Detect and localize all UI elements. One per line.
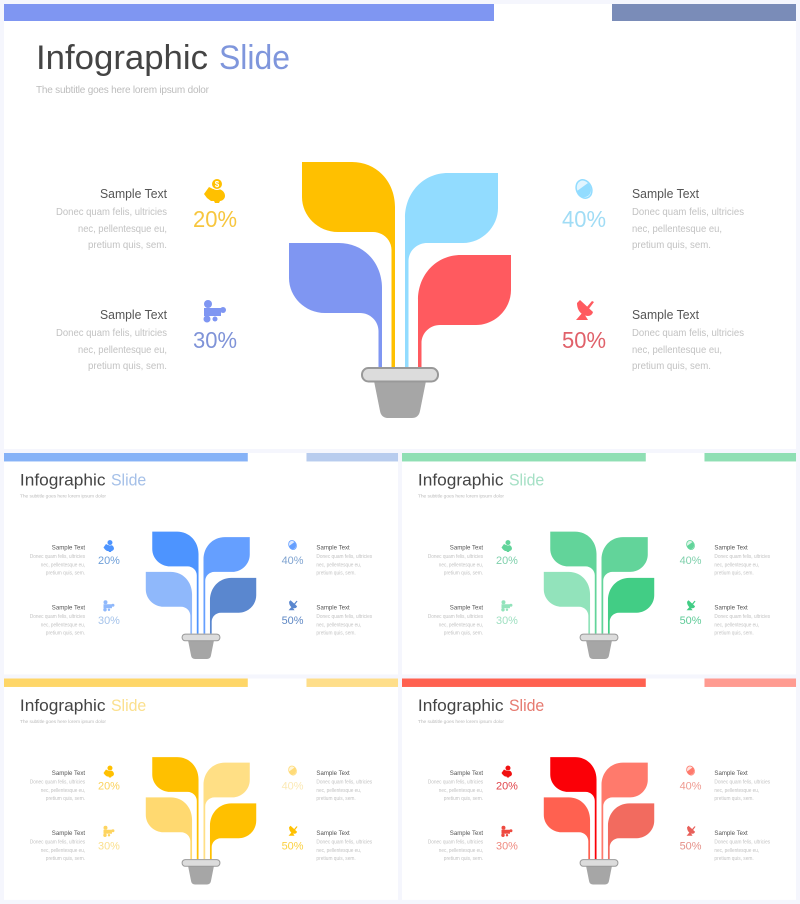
top accent bar right (306, 453, 398, 461)
callout: bottom right 50%: 50% (680, 841, 701, 853)
icon: piggy bank (502, 765, 512, 778)
panel: blue slide (4, 453, 398, 674)
top accent bar left (4, 678, 248, 687)
callout: top right 40% (282, 765, 372, 802)
leaf: bottom left (544, 797, 590, 859)
callout: top right 40%: nec, pellentesque eu, (714, 562, 759, 568)
leaf: bottom right (608, 578, 654, 634)
callout: top left 20%: 20% (496, 555, 518, 567)
callout: top left 20%: nec, pellentesque eu, (439, 562, 483, 568)
callout: top right 40%: Donec quam felis, ultricies (316, 779, 372, 785)
callout: top left 20%: Sample Text (100, 186, 167, 201)
callout: bottom left 30%: pretium quis, sem. (46, 856, 85, 862)
title: Slide (219, 39, 290, 77)
title: Slide (509, 696, 544, 715)
leaf: bottom right (210, 578, 256, 634)
plant chart (146, 532, 256, 659)
callout: bottom right 50%: Donec quam felis, ultricies (316, 614, 372, 620)
callout: top right 40%: Donec quam felis, ultricies (316, 554, 372, 560)
callout: bottom right 50%: nec, pellentesque eu, (316, 848, 361, 854)
callout: top right 40%: 40% (282, 780, 303, 792)
callout: top left 20%: pretium quis, sem. (46, 796, 85, 802)
callout: bottom right 50%: 50% (562, 327, 606, 353)
callout: bottom right 50%: pretium quis, sem. (632, 360, 711, 372)
callout: bottom left 30% (428, 826, 518, 862)
callout: bottom left 30%: Donec quam felis, ultricies (30, 840, 85, 846)
callout: bottom left 30%: nec, pellentesque eu, (78, 344, 167, 356)
callout: bottom left 30%: Sample Text (52, 605, 85, 612)
leaf: yellow 20% (302, 162, 395, 367)
callout: top left 20% (428, 540, 518, 576)
callout: top right 40%: pretium quis, sem. (316, 796, 356, 802)
callout: bottom right 50% (282, 826, 372, 862)
plant chart (289, 162, 511, 418)
callout: top left 20%: Donec quam felis, ultricies (30, 554, 85, 560)
callout: top right 40%: nec, pellentesque eu, (316, 788, 361, 794)
icon: satellite dish (289, 600, 298, 610)
pot body (374, 381, 426, 418)
callout: top left 20%: pretium quis, sem. (88, 239, 167, 251)
callout: bottom right 50%: pretium quis, sem. (316, 631, 356, 637)
top accent bar left (402, 453, 646, 461)
callout: bottom left 30%: pretium quis, sem. (88, 360, 167, 372)
callout: top right 40%: pretium quis, sem. (316, 570, 356, 576)
leaf: bottom left (544, 572, 590, 634)
callout: bottom left 30%: 30% (496, 841, 518, 853)
callout: top right 40%: pretium quis, sem. (714, 570, 754, 576)
callout: top left 20%: 20% (98, 780, 120, 792)
callout: bottom right 50%: nec, pellentesque eu, (316, 623, 361, 629)
callout: top right 40%: Sample Text (316, 545, 350, 552)
callout: top right 40%: 40% (282, 555, 303, 567)
pot rim (182, 860, 220, 866)
callout: bottom left 30%: Sample Text (450, 605, 483, 612)
icon: puzzle piece (103, 826, 114, 837)
pot rim (182, 634, 220, 641)
callout: bottom left 30%: Sample Text (450, 830, 483, 837)
top accent bar right (704, 453, 796, 461)
callout: top left 20%: pretium quis, sem. (46, 570, 85, 576)
icon: piggy bank (502, 540, 512, 552)
callout: top left 20%: 20% (193, 206, 237, 232)
icon: satellite dish (687, 826, 696, 836)
pot body (188, 866, 214, 884)
icon: satellite dish (289, 826, 298, 836)
title: Infographic (20, 470, 105, 489)
callout: top left 20%: pretium quis, sem. (444, 570, 483, 576)
title: Infographic (36, 39, 208, 77)
callout: bottom left 30%: Sample Text (52, 830, 85, 837)
pot body (586, 641, 612, 659)
leaf: red 50% (418, 255, 511, 367)
callout: bottom left 30%: 30% (98, 615, 120, 627)
leaf: bottom right (210, 803, 256, 859)
callout: top right 40%: nec, pellentesque eu, (714, 788, 759, 794)
top accent bar right (704, 678, 796, 687)
callout: bottom right 50%: Sample Text (632, 307, 699, 322)
callout: top right 40%: Donec quam felis, ultricies (714, 779, 770, 785)
leaf: top right (601, 763, 648, 859)
callout: bottom left 30% (30, 600, 120, 637)
callout: bottom right 50%: Donec quam felis, ultricies (632, 327, 744, 339)
subtitle: The subtitle goes here lorem ipsum dolor (36, 85, 210, 96)
leaf: bottom left (146, 797, 192, 859)
leaf: bottom right (608, 803, 654, 859)
icon: computer mouse (287, 539, 298, 551)
callout: bottom right 50%: Sample Text (714, 830, 748, 837)
callout: top left 20%: Donec quam felis, ultricies (56, 206, 167, 218)
callout: top left 20%: nec, pellentesque eu, (41, 562, 85, 568)
callout: top left 20%: nec, pellentesque eu, (439, 788, 483, 794)
callout: bottom right 50%: 50% (282, 615, 303, 627)
subtitle: The subtitle goes here lorem ipsum dolor (418, 493, 504, 499)
callout: bottom right 50%: nec, pellentesque eu, (714, 623, 759, 629)
icon: computer mouse (685, 539, 696, 551)
callout: top right 40% (562, 177, 744, 251)
panel: red slide (402, 678, 796, 900)
callout: top right 40%: 40% (680, 555, 701, 567)
callout: bottom left 30%: pretium quis, sem. (444, 631, 483, 637)
icon: piggy bank: $ (215, 180, 220, 189)
icon: computer mouse (287, 765, 298, 776)
plant chart (146, 757, 256, 884)
leaf: top left (152, 757, 199, 859)
icon: puzzle piece (501, 600, 512, 611)
callout: top right 40%: pretium quis, sem. (632, 239, 711, 251)
callout: top left 20% (428, 765, 518, 802)
callout: bottom right 50%: Sample Text (316, 605, 350, 612)
callout: bottom right 50%: nec, pellentesque eu, (714, 848, 759, 854)
title: Infographic (418, 470, 503, 489)
callout: bottom left 30%: nec, pellentesque eu, (41, 623, 85, 629)
callout: top right 40%: 40% (680, 780, 701, 792)
callout: bottom left 30% (30, 826, 120, 862)
callout: bottom left 30%: Donec quam felis, ultricies (428, 614, 483, 620)
callout: top left 20%: Sample Text (52, 545, 85, 552)
callout: bottom right 50%: 50% (282, 841, 303, 853)
callout: bottom right 50%: Donec quam felis, ultricies (316, 840, 372, 846)
callout: top left 20% (30, 765, 120, 802)
leaf: top left (550, 757, 597, 859)
leaf: top left (550, 532, 597, 634)
callout: top left 20%: Donec quam felis, ultricies (428, 779, 483, 785)
leaf: top right (203, 763, 250, 859)
title: Slide (509, 470, 544, 489)
callout: bottom left 30%: 30% (193, 327, 237, 353)
callout: bottom left 30%: pretium quis, sem. (444, 856, 483, 862)
callout: top right 40%: Donec quam felis, ultricies (714, 554, 770, 560)
callout: top left 20% (30, 540, 120, 576)
top accent bar left (402, 678, 646, 687)
callout: bottom left 30%: Sample Text (100, 307, 167, 322)
subtitle: The subtitle goes here lorem ipsum dolor (20, 493, 106, 499)
leaf: light blue 40% (405, 173, 498, 367)
subtitle: The subtitle goes here lorem ipsum dolor (20, 719, 106, 725)
top accent bar left (4, 4, 494, 21)
title: Slide (111, 696, 146, 715)
callout: top right 40%: Sample Text (316, 770, 350, 777)
callout: bottom right 50%: pretium quis, sem. (714, 631, 754, 637)
icon: piggy bank (204, 178, 225, 203)
callout: bottom left 30%: Donec quam felis, ultricies (56, 327, 167, 339)
icon: computer mouse (685, 765, 696, 776)
callout: bottom left 30%: 30% (98, 841, 120, 853)
subtitle: The subtitle goes here lorem ipsum dolor (418, 719, 504, 725)
plant chart (544, 532, 654, 659)
callout: top left 20%: Donec quam felis, ultricies (428, 554, 483, 560)
callout: bottom left 30% (428, 600, 518, 637)
callout: bottom right 50% (680, 600, 770, 637)
panel: main slide (4, 4, 796, 449)
callout: top right 40% (680, 765, 770, 802)
pot rim (580, 860, 618, 866)
top accent bar right (306, 678, 398, 687)
pot body (188, 641, 214, 659)
callout: top left 20%: 20% (98, 555, 120, 567)
callout: bottom right 50% (562, 300, 744, 372)
icon: puzzle piece (501, 826, 512, 837)
title: Slide (111, 470, 146, 489)
leaf: top right (601, 537, 648, 634)
callout: top right 40%: Donec quam felis, ultricies (632, 206, 744, 218)
callout: top right 40%: 40% (562, 206, 606, 232)
panel: green slide (402, 453, 796, 674)
panel: yellow slide (4, 678, 398, 900)
callout: bottom left 30%: Donec quam felis, ultricies (428, 840, 483, 846)
callout: top right 40% (282, 539, 372, 576)
callout: bottom right 50%: nec, pellentesque eu, (632, 344, 722, 356)
pot body (586, 866, 612, 884)
callout: top left 20%: Sample Text (52, 770, 85, 777)
leaf: top left (152, 532, 199, 634)
callout: bottom right 50% (282, 600, 372, 637)
icon: satellite dish (576, 300, 594, 320)
leaf: periwinkle 30% (289, 243, 382, 367)
icon: puzzle piece (103, 600, 114, 611)
callout: bottom right 50%: Sample Text (316, 830, 350, 837)
callout: top left 20%: pretium quis, sem. (444, 796, 483, 802)
icon: piggy bank (104, 765, 114, 778)
leaf: bottom left (146, 572, 192, 634)
callout: top left 20%: nec, pellentesque eu, (78, 223, 167, 235)
callout: bottom right 50% (680, 826, 770, 862)
callout: bottom left 30%: nec, pellentesque eu, (41, 848, 85, 854)
icon: puzzle piece (204, 300, 226, 322)
callout: top right 40%: nec, pellentesque eu, (632, 223, 722, 235)
callout: bottom right 50%: Donec quam felis, ultricies (714, 614, 770, 620)
callout: bottom right 50%: 50% (680, 615, 701, 627)
callout: top left 20%: nec, pellentesque eu, (41, 788, 85, 794)
callout: top right 40%: Sample Text (714, 545, 748, 552)
callout: bottom right 50%: pretium quis, sem. (316, 856, 356, 862)
callout: top left 20% (56, 178, 237, 251)
callout: top right 40%: nec, pellentesque eu, (316, 562, 361, 568)
callout: top right 40% (680, 539, 770, 576)
callout: bottom right 50%: Sample Text (714, 605, 748, 612)
icon: piggy bank (104, 540, 114, 552)
callout: top left 20%: Sample Text (450, 545, 483, 552)
callout: top left 20%: Sample Text (450, 770, 483, 777)
callout: bottom left 30% (56, 300, 237, 372)
title: Infographic (418, 696, 503, 715)
icon: computer mouse (573, 177, 595, 201)
callout: top left 20%: 20% (496, 780, 518, 792)
callout: top right 40%: Sample Text (714, 770, 748, 777)
leaf: top right (203, 537, 250, 634)
plant chart (544, 757, 654, 884)
callout: top left 20%: Donec quam felis, ultricies (30, 779, 85, 785)
callout: bottom left 30%: nec, pellentesque eu, (439, 848, 483, 854)
callout: bottom left 30%: nec, pellentesque eu, (439, 623, 483, 629)
callout: top right 40%: pretium quis, sem. (714, 796, 754, 802)
callout: bottom left 30%: pretium quis, sem. (46, 631, 85, 637)
icon: satellite dish (687, 600, 696, 610)
top accent bar left (4, 453, 248, 461)
pot rim (580, 634, 618, 641)
callout: top right 40%: Sample Text (632, 186, 699, 201)
callout: bottom left 30%: 30% (496, 615, 518, 627)
title: Infographic (20, 696, 105, 715)
callout: bottom left 30%: Donec quam felis, ultricies (30, 614, 85, 620)
pot rim (362, 368, 438, 382)
callout: bottom right 50%: pretium quis, sem. (714, 856, 754, 862)
top accent bar right (612, 4, 796, 21)
callout: bottom right 50%: Donec quam felis, ultricies (714, 840, 770, 846)
